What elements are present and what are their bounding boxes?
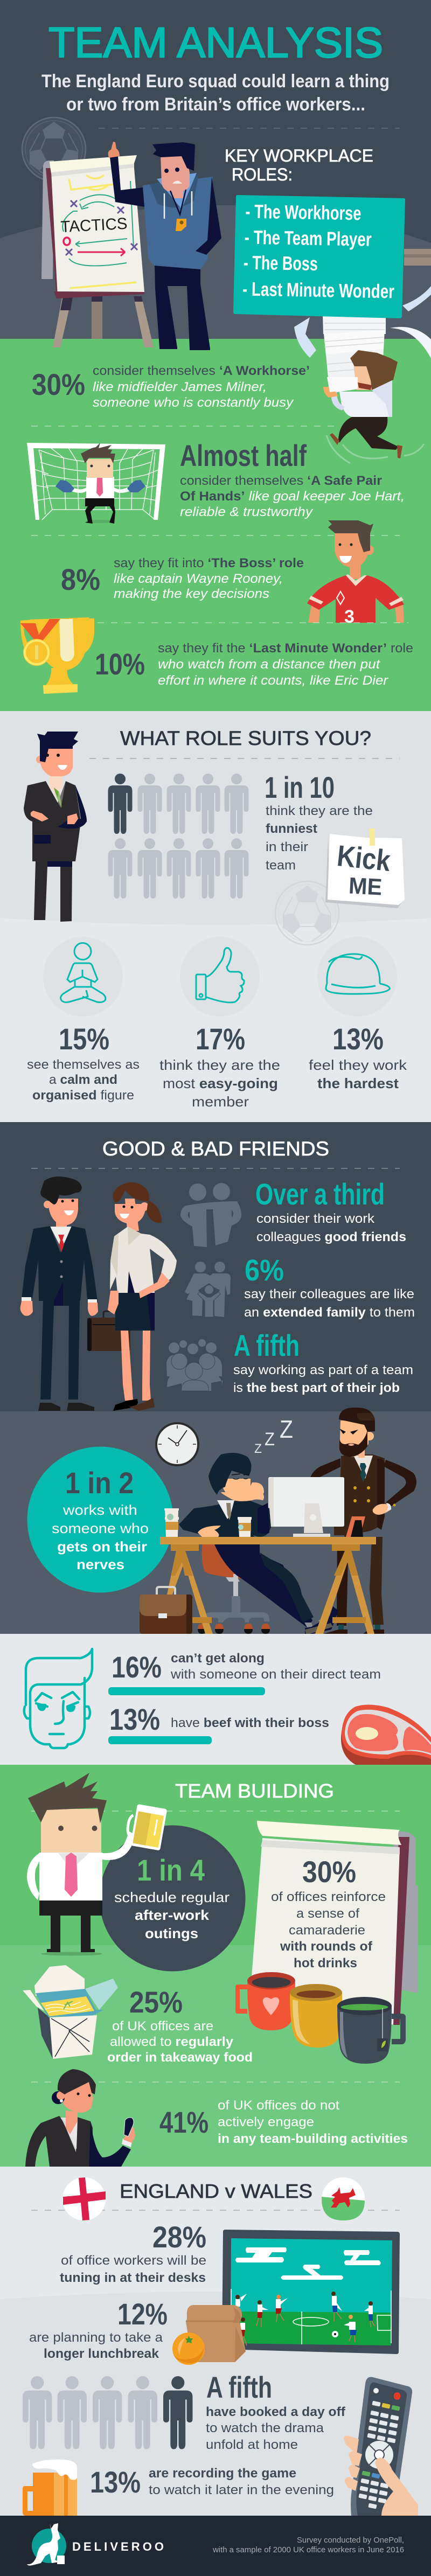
illustration: footballer captain: [307, 520, 404, 627]
title: TEAM ANALYSIS: [48, 18, 383, 66]
illustration: goalkeeper in goal: [27, 443, 165, 524]
stat: a fifth day off: to watch the drama: [206, 2421, 324, 2435]
panel: 30% flipchart: camaraderie: [289, 1923, 365, 1938]
stat: 16% can't get along: with someone on their direct team: [170, 1667, 381, 1682]
source note: Survey conducted by OnePoll,: [297, 2536, 404, 2545]
stat: 6% extended family: say their colleagues are like: [244, 1287, 414, 1301]
panel: 30% flipchart: [252, 1821, 418, 2025]
stat: 25% takeaway food: 25%: [129, 1985, 183, 2019]
stat: 15% calm and organised: organised figure: [32, 1088, 134, 1103]
icon: computer monitor: [268, 1477, 344, 1537]
panel: sleeping colleague background: [0, 1411, 431, 1634]
illustration: workhorse man running: [323, 350, 424, 463]
stat: 12% lunchbreak: [29, 2297, 168, 2361]
icon: two friends: [180, 1183, 241, 1247]
panel: good and bad friends background: [0, 1122, 431, 1412]
stat: 25% takeaway food: [107, 1985, 253, 2065]
panel: intro background: [0, 0, 431, 339]
stat: 30% workhorse: 30%: [32, 367, 85, 401]
icon: hard hat: [317, 937, 397, 1017]
stat: 10% last minute wonder: 10%: [95, 647, 145, 681]
heading: England v Wales: ENGLAND v WALES: [120, 2180, 312, 2202]
icon: family: [185, 1262, 231, 1317]
icon: tactics flipchart: [41, 155, 154, 347]
wordmark: DELIVEROO: [72, 2540, 164, 2553]
icon: kick me note: Kick: [336, 839, 392, 878]
heading: key workplace roles: ROLES:: [232, 165, 293, 184]
panel: 30% flipchart: of offices reinforce: [271, 1890, 386, 1904]
icon: sleeping zzz: Z: [280, 1415, 293, 1443]
panel: what role suits you background: [0, 711, 431, 1122]
stat: a fifth best part: [233, 1328, 413, 1395]
icon: faint football: [275, 881, 339, 945]
illustration: woman on phone: [25, 2069, 135, 2167]
icon: ten people pictogram: [108, 774, 249, 899]
heading: key workplace roles: KEY WORKPLACE: [225, 146, 373, 165]
source note: [212, 2536, 404, 2554]
stat: a fifth day off: A fifth: [206, 2370, 272, 2404]
icon: orange picture frame: [346, 1516, 365, 1537]
stat: 1 in 4 circle: 1 in 4: [137, 1853, 205, 1887]
players: [235, 2292, 374, 2347]
stat: 13% beef with boss: have beef with their boss: [171, 1716, 329, 1730]
icon: lunch bag and orange: [172, 2305, 246, 2365]
icon: television with football match: [222, 2230, 400, 2354]
heading: good and bad friends: GOOD & BAD FRIENDS: [102, 1138, 329, 1160]
stat: over a third: [255, 1177, 406, 1244]
icon: three mugs: [235, 1972, 406, 2064]
illustration: angry bearded boss: [310, 1408, 416, 1634]
icon: sleeping zzz: [254, 1415, 293, 1456]
panel: role list: - The Boss: [243, 252, 318, 275]
stat: a fifth best part: say working as part of a team: [233, 1363, 413, 1377]
stat: 10% last minute wonder: who watch from a distance then put: [158, 657, 380, 672]
logo: Deliveroo kangaroo: [27, 2523, 164, 2566]
stat: 41% no team building: [159, 2098, 408, 2146]
stat: 8% boss: [61, 556, 304, 601]
callout: 1 in 2 circle: someone who: [52, 1520, 149, 1536]
stat: 17% easy-going: member: [192, 1094, 249, 1110]
stat: 16% can't get along: can’t get along: [171, 1651, 265, 1666]
stat: 13% work hardest: [309, 937, 407, 1091]
icon: pint of beer: [23, 2460, 77, 2516]
icon: kick me note: [325, 829, 405, 908]
stat: 1 in 10: team: [266, 858, 296, 873]
stat: over a third: consider their work: [256, 1212, 375, 1226]
icon: sleeping zzz: Z: [265, 1429, 275, 1450]
stat: almost half: Of Hands’ like goal keeper Joe Hart,: [180, 489, 405, 504]
illustration: woman with briefcase: [87, 1182, 177, 1411]
icon: coffee cups on desk: [164, 1508, 252, 1537]
callout: 1 in 2 circle: 1 in 2: [65, 1466, 134, 1500]
panel: footer background: [0, 2516, 431, 2576]
icon: takeaway noodle box: [23, 1965, 118, 2059]
stat: 28% at desks: [60, 2220, 206, 2285]
icon: trophy with medal: [20, 617, 94, 694]
stat: 41% no team building: of UK offices do not: [218, 2098, 339, 2113]
stat: over a third: Over a third: [255, 1177, 385, 1211]
icon: angry face outline: [24, 1649, 92, 1748]
icon: Wales flag: [322, 2177, 365, 2220]
icon: kick me note: ME: [348, 873, 383, 901]
icon: steak: [341, 1704, 431, 1765]
panel: 30% flipchart: with rounds of: [280, 1939, 373, 1954]
stat: 13% work hardest: feel they work: [309, 1057, 407, 1073]
stat: 28% at desks: tuning in at their desks: [60, 2271, 206, 2285]
stat: 28% at desks: of office workers will be: [61, 2253, 206, 2268]
source note: with a sample of 2000 UK office workers in June 2016: [212, 2545, 404, 2554]
callout: 1 in 2 circle: [27, 1447, 173, 1592]
stat: 13% recording: to watch it later in the evening: [149, 2483, 334, 2497]
heading: team building: TEAM BUILDING: [175, 1780, 334, 1802]
stat: 6% extended family: [244, 1253, 415, 1320]
stat: 10% last minute wonder: say they fit the ‘Last Minute Wonder’ role: [158, 641, 413, 656]
icon: sleeping zzz: Z: [254, 1442, 262, 1456]
subtitle: or two from Britain’s office workers...: [66, 94, 365, 115]
stat: 30% workhorse: someone who is constantly busy: [93, 395, 294, 410]
stat: 10% last minute wonder: [95, 641, 413, 688]
stat: 1 in 4 circle: outings: [145, 1925, 198, 1941]
panel: beef background: [0, 1634, 431, 1765]
stat: 41% no team building: 41%: [159, 2105, 208, 2139]
icon: remote control in hand: [344, 2377, 418, 2516]
stat: almost half: [180, 438, 405, 519]
stat: 16% can't get along: 16%: [112, 1650, 162, 1684]
subtitle: The England Euro squad could learn a thing: [41, 71, 390, 92]
stat: 1 in 10: think they are the: [266, 804, 373, 818]
stat: 15% calm and organised: 15%: [59, 1022, 109, 1056]
illustration: sleeping man at desk: [179, 1453, 338, 1634]
panel: role list: [233, 195, 405, 318]
panel: roles background: [0, 339, 431, 711]
stat: almost half: consider themselves ‘A Safe Pair: [180, 474, 382, 488]
stat: almost half: reliable & trustworthy: [180, 505, 314, 519]
stat: 6% extended family: 6%: [245, 1253, 284, 1287]
tactics label: TACTICS: [60, 215, 128, 236]
stat: 41% no team building: in any team-building activities: [218, 2132, 408, 2146]
illustration: desk: [160, 1537, 376, 1634]
illustration: man in suit arms crossed: [24, 732, 87, 922]
stat: 15% calm and organised: see themselves as: [27, 1057, 140, 1072]
stat: 30% workhorse: [32, 364, 310, 410]
stat: a fifth best part: is the best part of their job: [233, 1381, 400, 1395]
panel: 30% flipchart: 30%: [302, 1855, 356, 1889]
stat: 13% work hardest: 13%: [332, 1022, 384, 1056]
icon: hurdle beams: [404, 249, 431, 266]
stat: 1 in 10: funniest: [266, 821, 317, 836]
stat: 12% lunchbreak: longer lunchbreak: [44, 2347, 159, 2361]
stat: a fifth best part: A fifth: [234, 1328, 300, 1362]
stat: 30% workhorse: like midfielder James Milner,: [93, 380, 267, 394]
illustration: footballer captain: 3: [344, 607, 354, 627]
stat: a fifth day off: have booked a day off: [206, 2405, 346, 2419]
callout: 1 in 2 circle: gets on their: [57, 1538, 147, 1555]
icon: football: [22, 117, 86, 181]
stat: 1 in 10: in their: [266, 840, 308, 854]
stat: 17% easy-going: 17%: [196, 1022, 245, 1056]
panel: England v Wales background: [0, 2167, 431, 2516]
illustration: coach: [108, 142, 221, 350]
stat: 30% workhorse: consider themselves ‘A Workhorse’: [93, 364, 310, 378]
stat: 25% takeaway food: order in takeaway food: [107, 2050, 253, 2065]
subtitle: [41, 71, 390, 115]
stat: 6% extended family: an extended family to them: [244, 1305, 415, 1320]
panel: role list: - The Team Player: [244, 226, 372, 250]
stat: over a third: colleagues good friends: [256, 1230, 406, 1244]
icon: meditating figure: [43, 937, 123, 1017]
stat: 12% lunchbreak: are planning to take a: [29, 2330, 163, 2345]
stat: 13% recording: [90, 2465, 334, 2499]
callout: 1 in 2 circle: works with: [62, 1502, 137, 1518]
icon: group of people: [166, 1339, 223, 1391]
callout: 1 in 2 circle: nerves: [77, 1556, 124, 1572]
illustration: man in navy suit: [20, 1176, 98, 1411]
stat: 8% boss: say they fit into ‘The Boss’ role: [114, 556, 304, 570]
panel: role list: - The Workhorse: [245, 200, 362, 224]
stat: 8% boss: like captain Wayne Rooney,: [114, 572, 283, 586]
stat: 1 in 4 circle: after-work: [135, 1907, 210, 1923]
panel: 30% flipchart: hot drinks: [294, 1956, 357, 1971]
stat: 15% calm and organised: a calm and: [49, 1073, 117, 1087]
icon: briefcase: [140, 1587, 192, 1634]
illustration: man with beer: [27, 1773, 167, 1955]
heading: what role suits you: WHAT ROLE SUITS YOU?: [120, 727, 371, 749]
stat: 25% takeaway food: allowed to regularly: [110, 2035, 234, 2049]
stat: 1 in 4 circle: schedule regular: [114, 1889, 230, 1905]
stat: 1 in 4 circle: [99, 1825, 246, 1972]
stat: 12% lunchbreak: 12%: [117, 2297, 168, 2331]
stat: 15% calm and organised: [27, 937, 140, 1103]
stat: 28% at desks: 28%: [152, 2220, 206, 2254]
stat: 17% easy-going: [159, 937, 280, 1110]
icon: beer mug: [124, 1803, 167, 1850]
stat: 10% last minute wonder: effort in where it counts, like Eric Dier: [158, 673, 388, 688]
heading: key workplace roles: [225, 146, 373, 184]
stat: 25% takeaway food: of UK offices are: [112, 2019, 213, 2034]
stat: a fifth day off: [206, 2370, 346, 2452]
icon: wall clock: [156, 1423, 198, 1465]
stat: 16% can't get along: [108, 1650, 381, 1695]
panel: team building background: [0, 1765, 431, 2167]
stat: 1 in 10: [265, 770, 373, 873]
illustration: office chair: [198, 1544, 270, 1634]
stat: 13% work hardest: the hardest: [317, 1075, 399, 1091]
stat: almost half: Almost half: [180, 438, 307, 472]
stat: 17% easy-going: most easy-going: [163, 1075, 278, 1091]
icon: flying papers and stack: [294, 286, 431, 393]
stat: 1 in 10: 1 in 10: [265, 770, 335, 804]
stat: 13% recording: 13%: [90, 2465, 141, 2499]
stat: 17% easy-going: think they are the: [159, 1057, 280, 1073]
stat: 41% no team building: actively engage: [218, 2115, 314, 2129]
icon: five people pictogram: [23, 2376, 192, 2449]
stat: 8% boss: making the key decisions: [114, 587, 269, 601]
stat: 13% beef with boss: [108, 1702, 329, 1744]
stat: a fifth day off: unfold at home: [206, 2438, 298, 2452]
panel: 30% flipchart: a sense of: [296, 1906, 359, 1921]
stat: 13% beef with boss: 13%: [109, 1702, 160, 1736]
icon: England flag: [62, 2177, 106, 2220]
stat: 13% recording: are recording the game: [149, 2466, 296, 2481]
stat: 8% boss: 8%: [61, 562, 100, 596]
icon: thumbs up: [180, 937, 260, 1017]
